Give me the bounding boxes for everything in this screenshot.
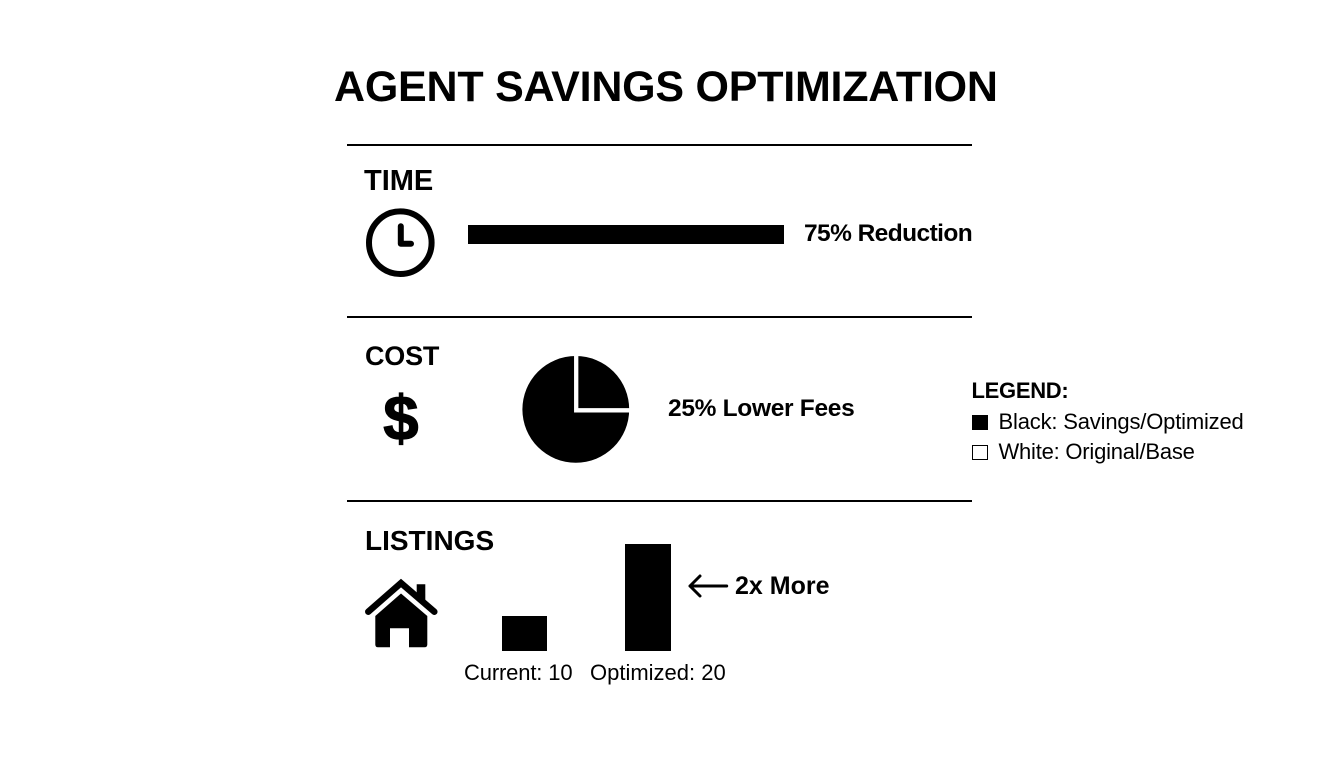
arrow [688,574,728,598]
icon: clock [366,208,435,277]
heading: cost: COST [365,341,439,371]
icon: house [365,578,438,648]
label: optimized: Optimized: 20 [590,660,726,685]
label: current: Current: 10 [464,660,572,685]
swatch: white [972,445,988,460]
legend item: black: Black: Savings/Optimized [998,409,1244,434]
label: cost: 25% Lower Fees [668,394,854,422]
legend item: white: White: Original/Base [998,439,1195,464]
heading: listings: LISTINGS [365,525,494,556]
panel: listings [365,525,829,685]
label: time reduction: 75% Reduction [804,220,972,246]
label: 2x more: 2x More [735,572,829,600]
bar: time reduction [468,225,784,244]
heading: time: TIME [364,165,433,197]
panel: cost [365,341,854,463]
panel: time [364,165,972,277]
title: AGENT SAVINGS OPTIMIZATION [334,62,998,110]
bar: current [502,616,547,651]
icon: dollar sign: $ [383,384,419,454]
swatch: black [972,415,988,430]
legend title: LEGEND: [972,378,1068,403]
legend [972,378,1244,464]
pie chart [522,356,630,463]
bar: optimized [624,544,671,651]
